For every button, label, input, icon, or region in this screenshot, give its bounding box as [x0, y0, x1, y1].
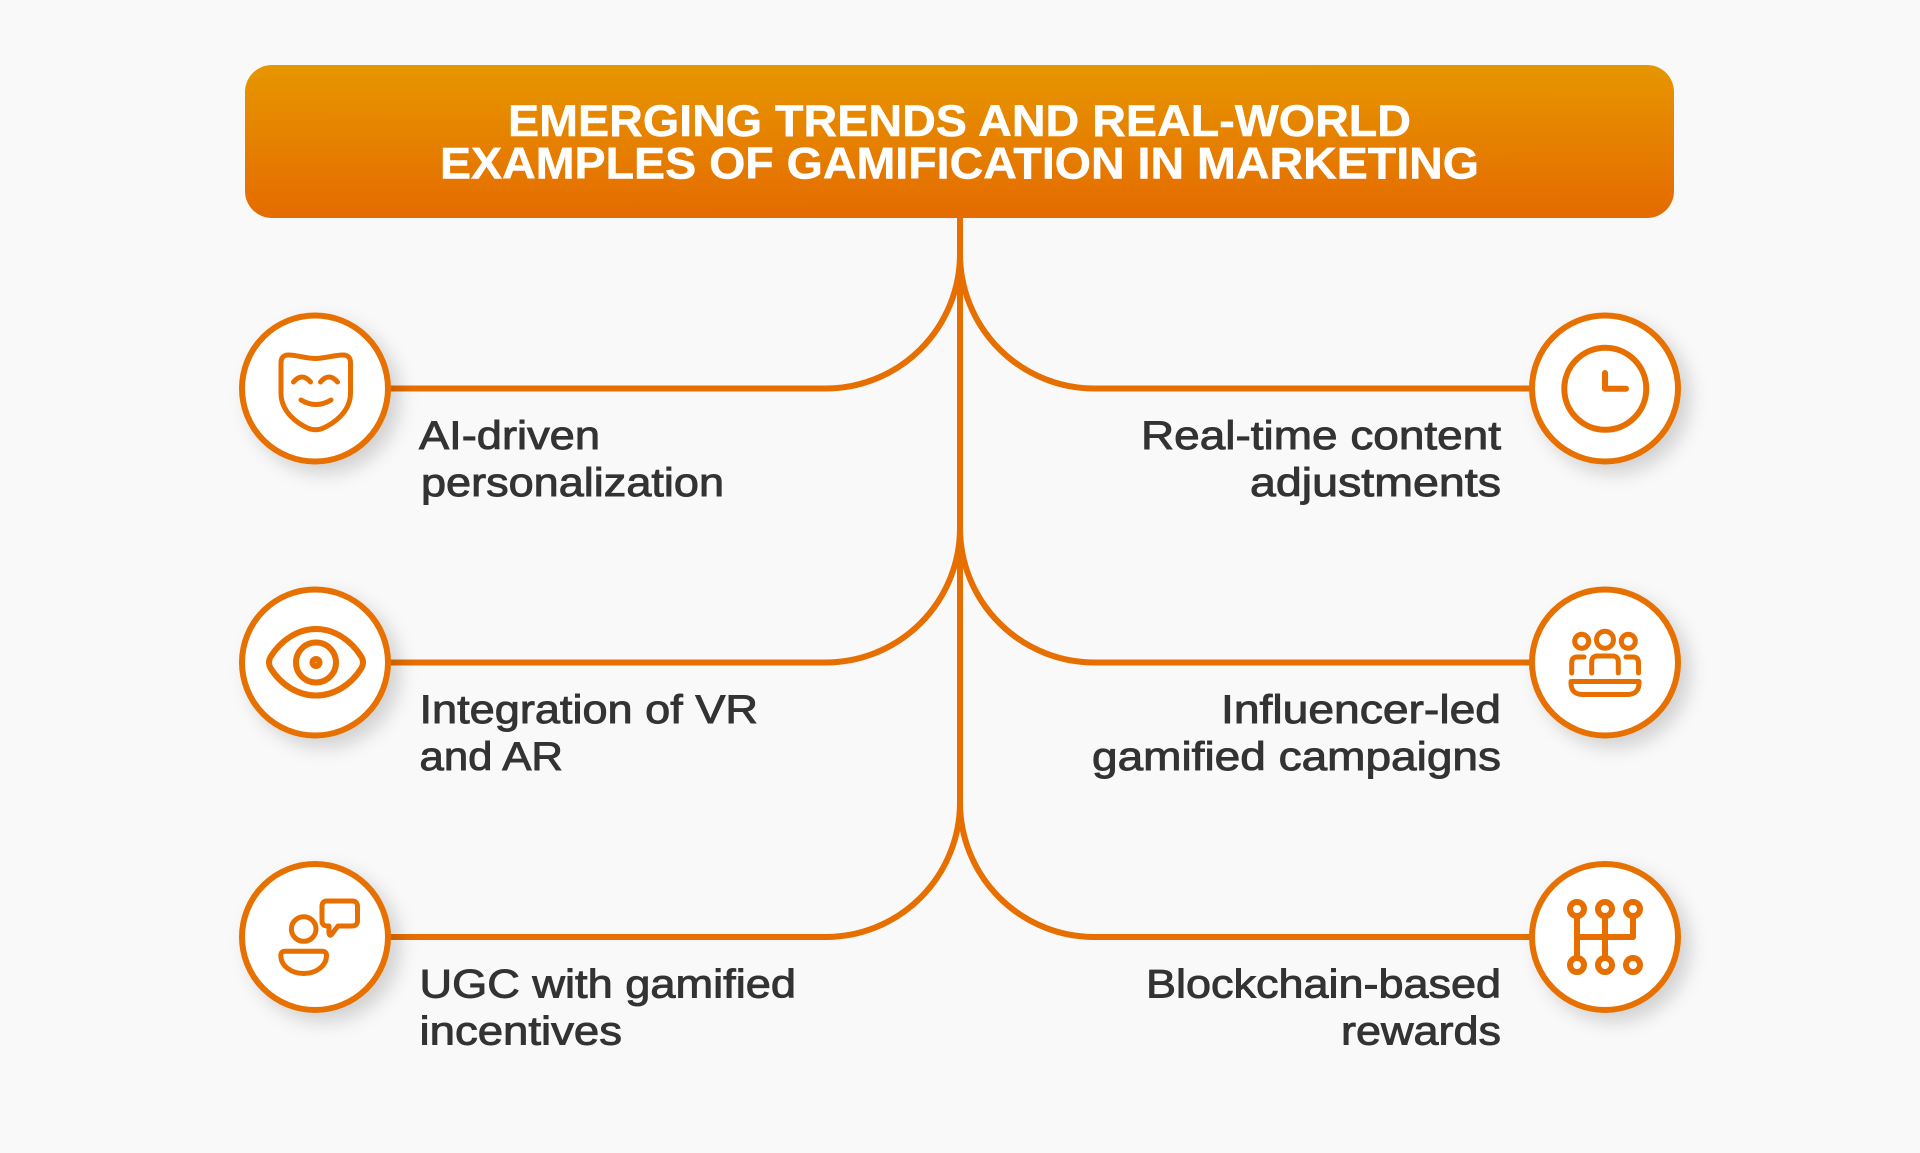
label: personalization: [421, 461, 724, 505]
item: Real-time content adjustments: [1141, 316, 1678, 505]
connector tree: [315, 215, 1605, 937]
title banner: [245, 65, 1674, 218]
icon: group of people at table: [1532, 590, 1678, 736]
label: Real-time content: [1141, 414, 1501, 458]
label: adjustments: [1250, 461, 1501, 505]
label: Integration of VR: [420, 688, 758, 732]
label: [1146, 962, 1501, 1053]
title: [440, 97, 1479, 188]
label: [1092, 688, 1501, 779]
icon: node network: [1532, 864, 1678, 1010]
icon: person with speech bubble: [242, 864, 388, 1010]
item: Influencer-led gamified campaigns: [1092, 590, 1678, 779]
label: incentives: [420, 1009, 622, 1053]
label: and AR: [420, 735, 563, 779]
label: [1141, 414, 1501, 505]
item: Integration of VR and AR: [242, 590, 758, 779]
item: UGC with gamified incentives: [242, 864, 796, 1053]
item: AI-driven personalization: [242, 316, 724, 505]
label: rewards: [1341, 1009, 1501, 1053]
icon: theatre mask: [242, 316, 388, 462]
title: EMERGING TRENDS AND REAL-WORLD: [508, 97, 1411, 146]
label: [420, 962, 796, 1053]
icon: clock: [1532, 316, 1678, 462]
icon: eye: [242, 590, 388, 736]
item: Blockchain-based rewards: [1146, 864, 1678, 1053]
label: [420, 688, 758, 779]
label: UGC with gamified: [420, 962, 796, 1006]
label: Blockchain-based: [1146, 962, 1501, 1006]
label: AI-driven: [419, 414, 600, 458]
title: EXAMPLES OF GAMIFICATION IN MARKETING: [440, 140, 1479, 188]
label: [419, 414, 724, 505]
label: Influencer-led: [1221, 688, 1501, 732]
label: gamified campaigns: [1092, 735, 1501, 779]
